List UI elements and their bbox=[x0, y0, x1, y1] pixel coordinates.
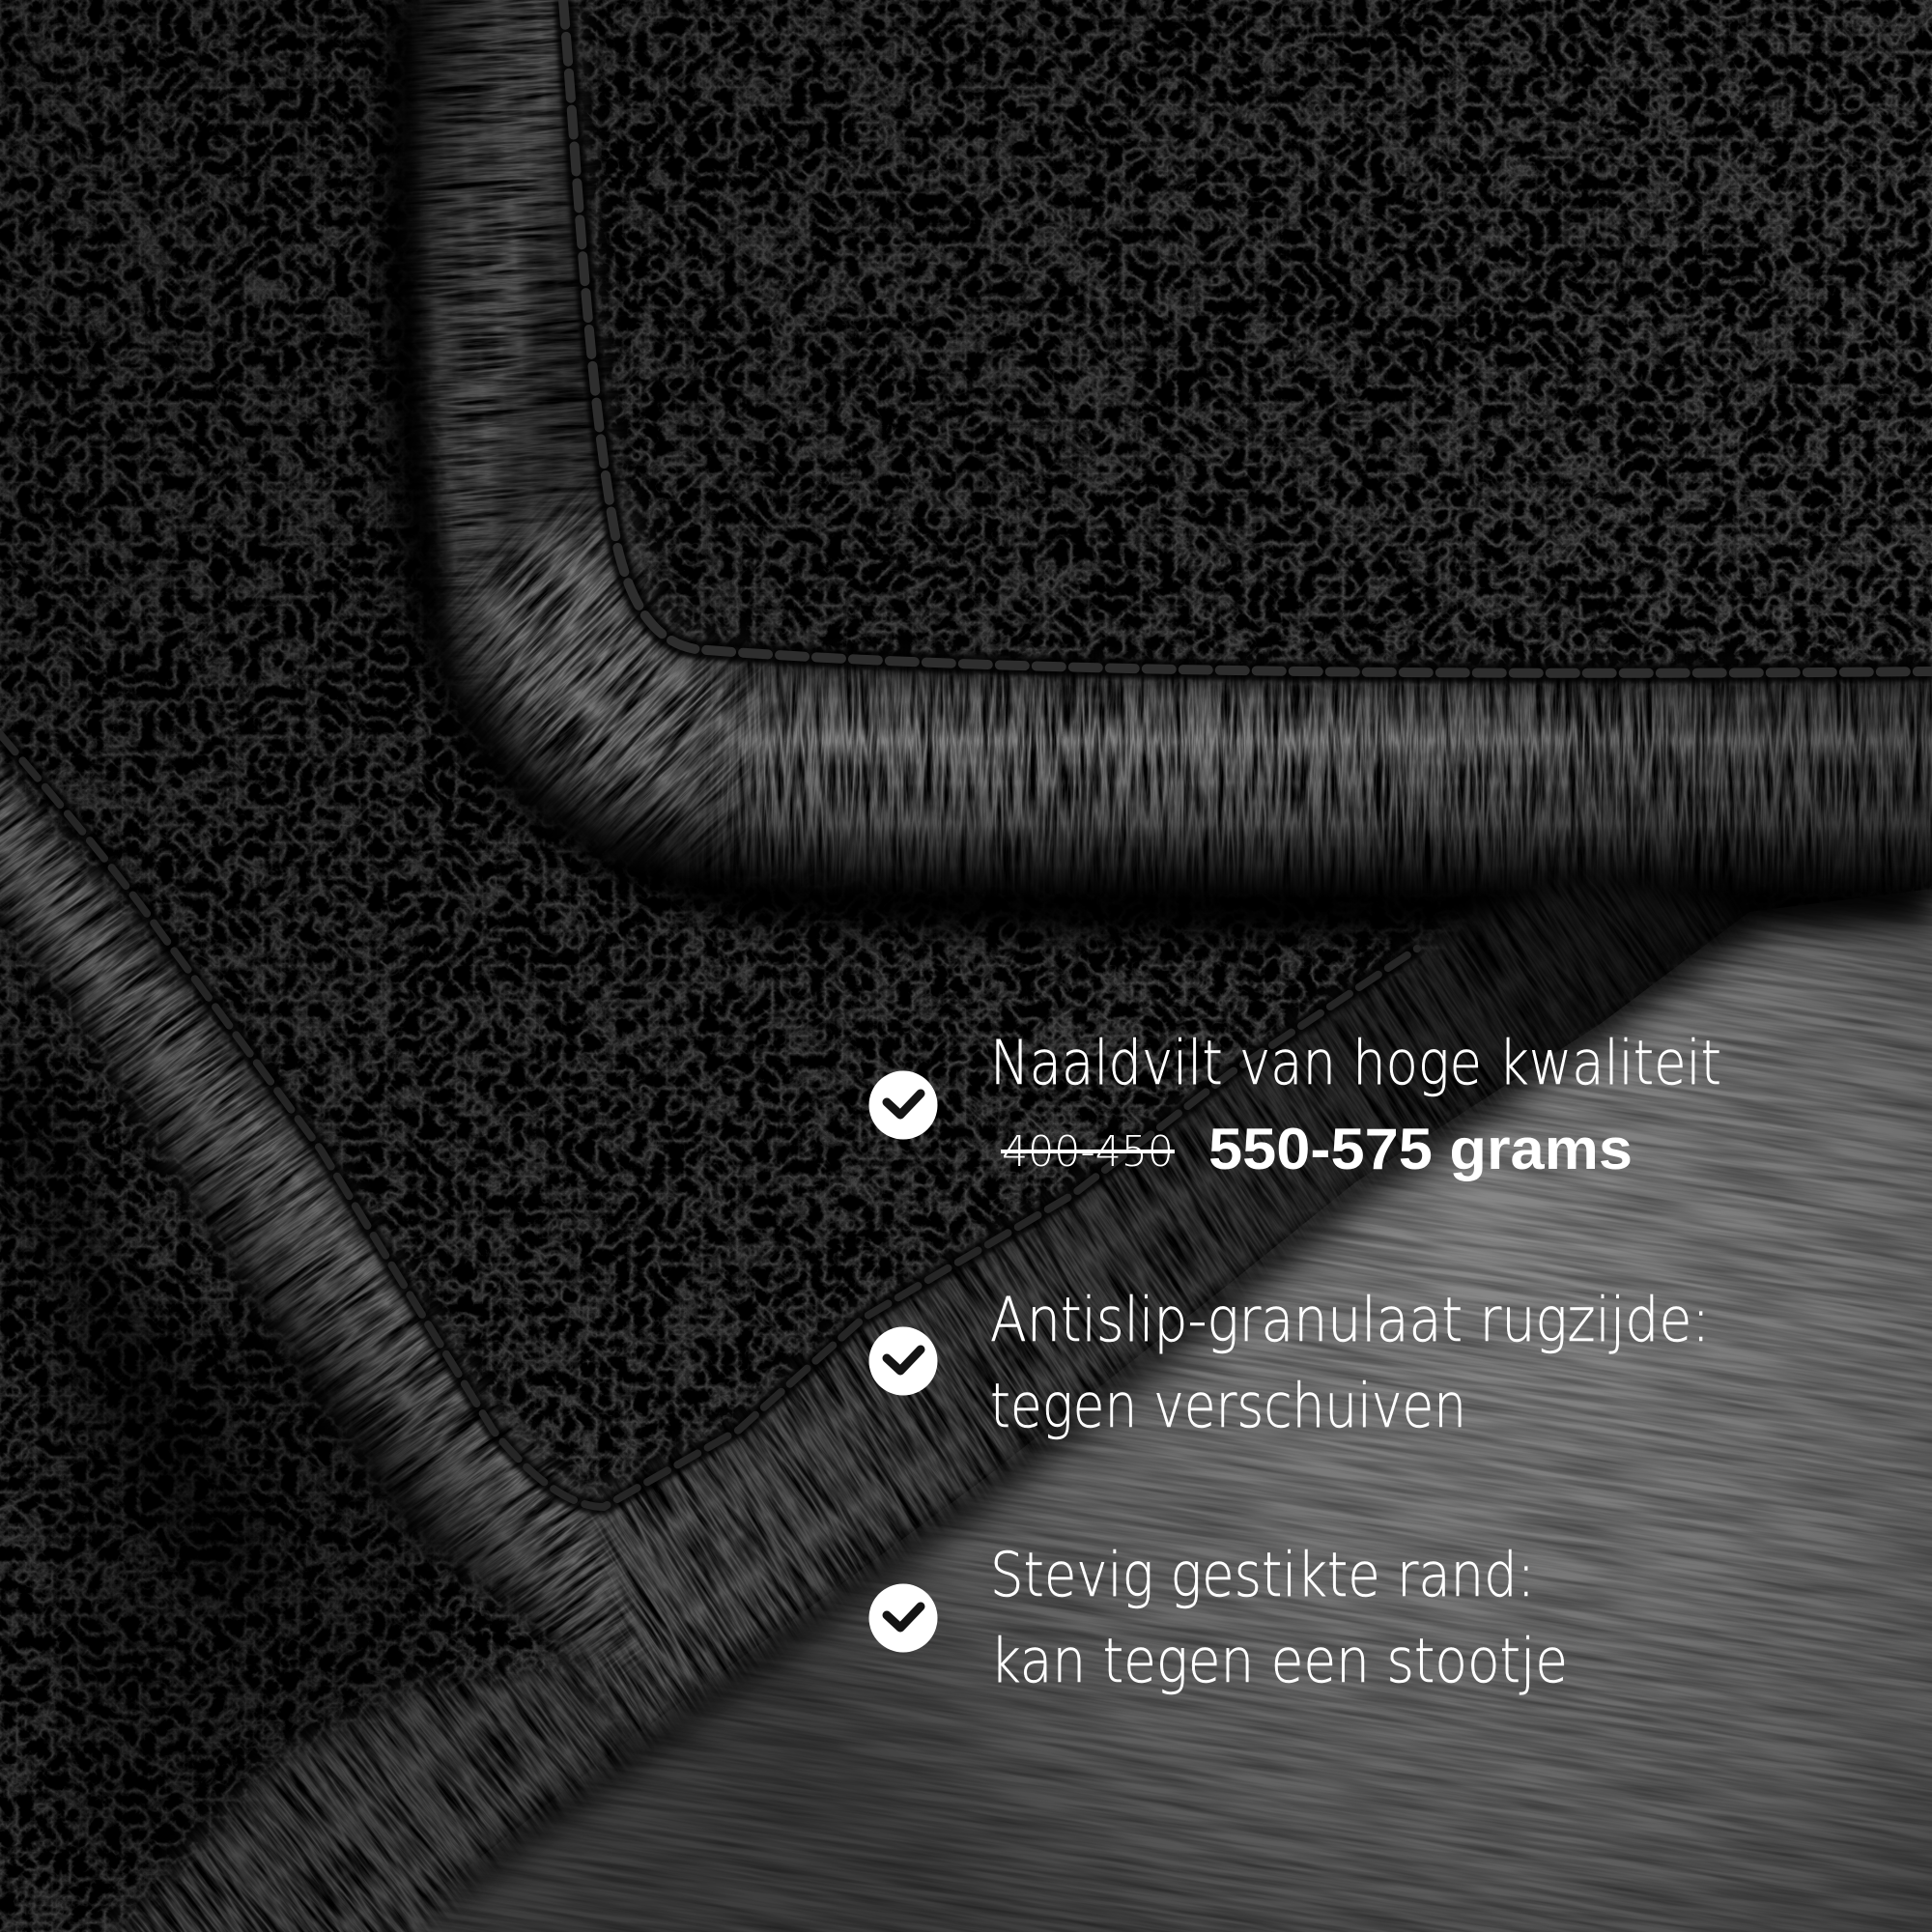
panel: upper mat border, horizontal part bbox=[664, 653, 1932, 908]
stitching: lower mat bbox=[0, 734, 1417, 1507]
panel: bottom-left mat border bbox=[97, 1653, 628, 1932]
panel: upper mat border, vertical part bbox=[411, 0, 641, 690]
text: feature 1: 550-575 grams bbox=[1208, 1117, 1633, 1181]
text: feature 2: Antislip-granulaat rugzijde: bbox=[990, 1285, 1710, 1355]
text: feature 3 bbox=[990, 1540, 1568, 1696]
icon: check 2 bbox=[869, 1327, 937, 1395]
text: feature 1: 400-450 bbox=[1002, 1127, 1174, 1177]
panel: upper mat border, corner bbox=[442, 481, 768, 872]
icon: check 1 bbox=[869, 1070, 937, 1140]
text: feature 1: Naaldvilt van hoge kwaliteit bbox=[990, 1028, 1721, 1098]
text: feature 3: Stevig gestikte rand: bbox=[990, 1540, 1535, 1610]
text: feature 2 bbox=[990, 1285, 1710, 1441]
text: feature 2: tegen verschuiven bbox=[990, 1371, 1466, 1441]
stitching: upper mat bbox=[563, 0, 1932, 673]
text: feature 1 bbox=[990, 1028, 1721, 1181]
text: feature 3: kan tegen een stootje bbox=[990, 1626, 1568, 1696]
panel: lower mat border, left diagonal bbox=[0, 751, 645, 1677]
icon: check 3 bbox=[869, 1584, 937, 1652]
panel: brushed metal floor bbox=[382, 889, 1932, 1932]
panel: lower mat border, right diagonal bbox=[577, 881, 1727, 1748]
